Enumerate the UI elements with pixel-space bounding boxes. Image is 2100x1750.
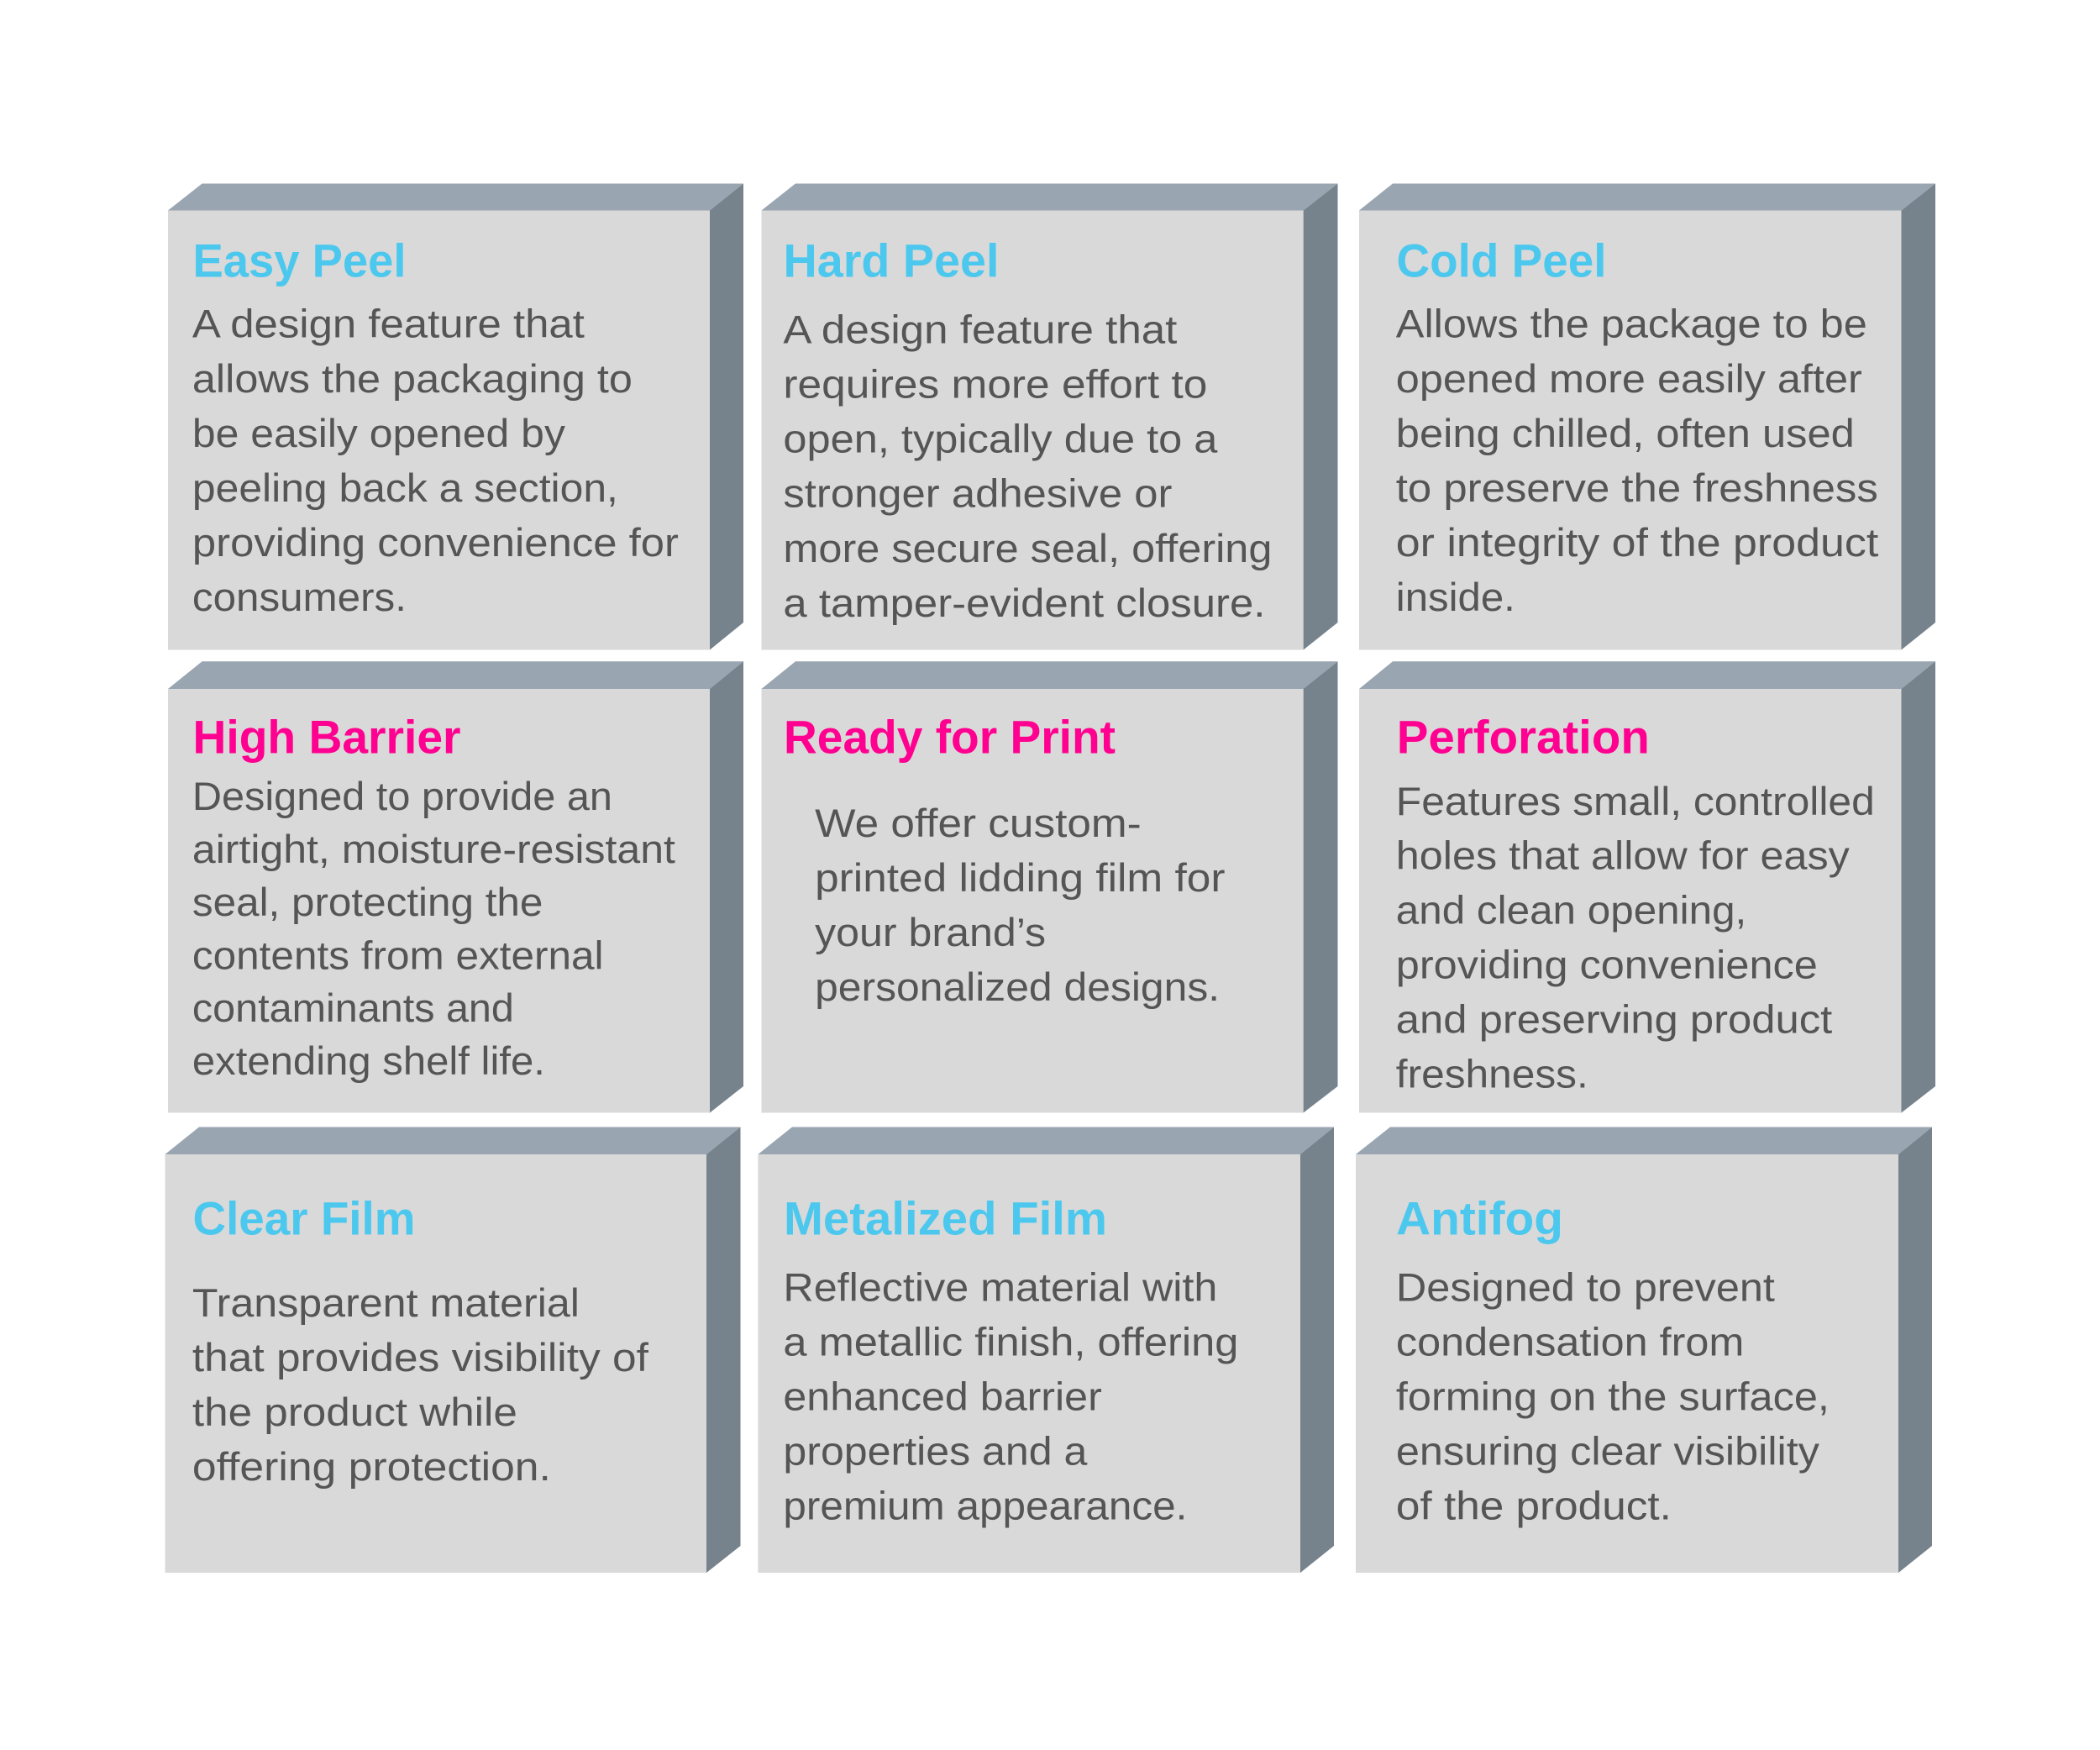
text block: High Barrier description: Designed to provide an [192, 774, 612, 818]
text block: Hard Peel description: more secure seal, offering [783, 526, 1272, 570]
text block: Cold Peel description: being chilled, often used [1396, 411, 1855, 455]
text block: Cold Peel description: Allows the package to be [1396, 302, 1867, 346]
text block: Ready for Print description: We offer custom- [815, 801, 1142, 845]
text block: Easy Peel description: consumers. [192, 575, 407, 619]
panel: Perforation [1359, 661, 1935, 1112]
text block: High Barrier description: extending shelf life. [192, 1038, 545, 1083]
text block: Cold Peel description: inside. [1396, 575, 1515, 619]
text block: Hard Peel description: open, typically due to a [783, 417, 1218, 461]
text block: Clear Film description: Transparent material [192, 1280, 580, 1325]
text block: High Barrier description: airtight, moisture-resistant [192, 827, 675, 871]
text block: Metalized Film description: properties and a [783, 1429, 1088, 1474]
text block: Metalized Film description: enhanced barrier [783, 1374, 1102, 1419]
text block: Perforation description: and clean opening, [1396, 888, 1746, 933]
text block: Easy Peel description: providing convenience for [192, 520, 679, 565]
heading: High Barrier: High Barrier [193, 710, 460, 763]
text block: Perforation description: freshness. [1396, 1051, 1588, 1096]
panel: Clear Film [165, 1127, 741, 1573]
text block: Clear Film description: offering protection. [192, 1444, 551, 1489]
text block: Antifog description: condensation from [1396, 1319, 1744, 1364]
text block: Perforation description: and preserving product [1396, 996, 1832, 1042]
heading: Metalized Film: Metalized Film [784, 1191, 1107, 1244]
heading: Easy Peel: Easy Peel [193, 234, 407, 286]
text block: Easy Peel description: A design feature that [192, 302, 585, 346]
text block: High Barrier description [192, 774, 675, 1083]
text block: High Barrier description: seal, protecting the [192, 880, 543, 924]
text block: Cold Peel description: opened more easily after [1396, 356, 1862, 401]
panel: Metalized Film [758, 1127, 1334, 1573]
text block: Easy Peel description: allows the packaging to [192, 356, 633, 401]
text block: Metalized Film description: a metallic finish, offering [783, 1319, 1238, 1364]
text block: Hard Peel description: A design feature that [783, 307, 1177, 352]
text block: Antifog description: of the product. [1396, 1484, 1672, 1527]
text block: Hard Peel description: requires more effort to [783, 362, 1207, 407]
panel: High Barrier [168, 661, 743, 1112]
heading: Antifog: Antifog [1396, 1191, 1563, 1245]
text block: Hard Peel description [783, 307, 1272, 625]
text block: High Barrier description: contaminants and [192, 985, 514, 1030]
text block: Antifog description: ensuring clear visibility [1396, 1428, 1819, 1474]
text block: Antifog description: forming on the surface, [1396, 1374, 1830, 1418]
text block: Easy Peel description: be easily opened by [192, 411, 565, 455]
text block: Clear Film description: the product while [192, 1390, 517, 1434]
text block: Easy Peel description: peeling back a section, [192, 465, 618, 510]
heading: Hard Peel: Hard Peel [783, 234, 1000, 286]
text block: Cold Peel description: or integrity of the product [1396, 520, 1878, 565]
text block: Metalized Film description [783, 1265, 1238, 1528]
text block: Ready for Print description: your brand’s [815, 910, 1046, 954]
text block: Perforation description: Features small, controlled [1396, 779, 1875, 823]
panel: Hard Peel [761, 183, 1337, 650]
heading: Clear Film: Clear Film [193, 1191, 415, 1244]
text block: Perforation description: holes that allow for easy [1396, 833, 1850, 878]
panel: Antifog [1356, 1127, 1932, 1573]
text block: Ready for Print description [815, 801, 1225, 1009]
text block: Metalized Film description: premium appearance. [783, 1484, 1187, 1528]
text block: Easy Peel description [192, 302, 679, 619]
text block: Perforation description [1396, 779, 1875, 1096]
text block: Cold Peel description [1396, 302, 1878, 619]
text block: Antifog description: Designed to prevent [1396, 1265, 1775, 1309]
text block: Antifog description [1396, 1265, 1830, 1527]
text block: Hard Peel description: a tamper-evident closure. [783, 581, 1265, 625]
text block: Ready for Print description: printed lidding film for [815, 855, 1225, 900]
heading: Perforation: Perforation [1397, 710, 1650, 763]
panel: Ready for Print [761, 661, 1337, 1112]
text block: Metalized Film description: Reflective material with [783, 1265, 1217, 1309]
panel: Easy Peel [168, 183, 743, 650]
heading: Ready for Print: Ready for Print [784, 710, 1116, 763]
text block: Cold Peel description: to preserve the freshness [1396, 465, 1878, 510]
text block: Hard Peel description: stronger adhesive or [783, 471, 1172, 516]
text block: Clear Film description [192, 1280, 649, 1489]
heading: Cold Peel: Cold Peel [1396, 234, 1606, 286]
text block: High Barrier description: contents from external [192, 933, 604, 978]
text block: Perforation description: providing convenience [1396, 943, 1818, 986]
panel: Cold Peel [1359, 183, 1935, 650]
text block: Clear Film description: that provides visibility of [192, 1335, 649, 1380]
text block: Ready for Print description: personalized designs. [815, 964, 1220, 1009]
